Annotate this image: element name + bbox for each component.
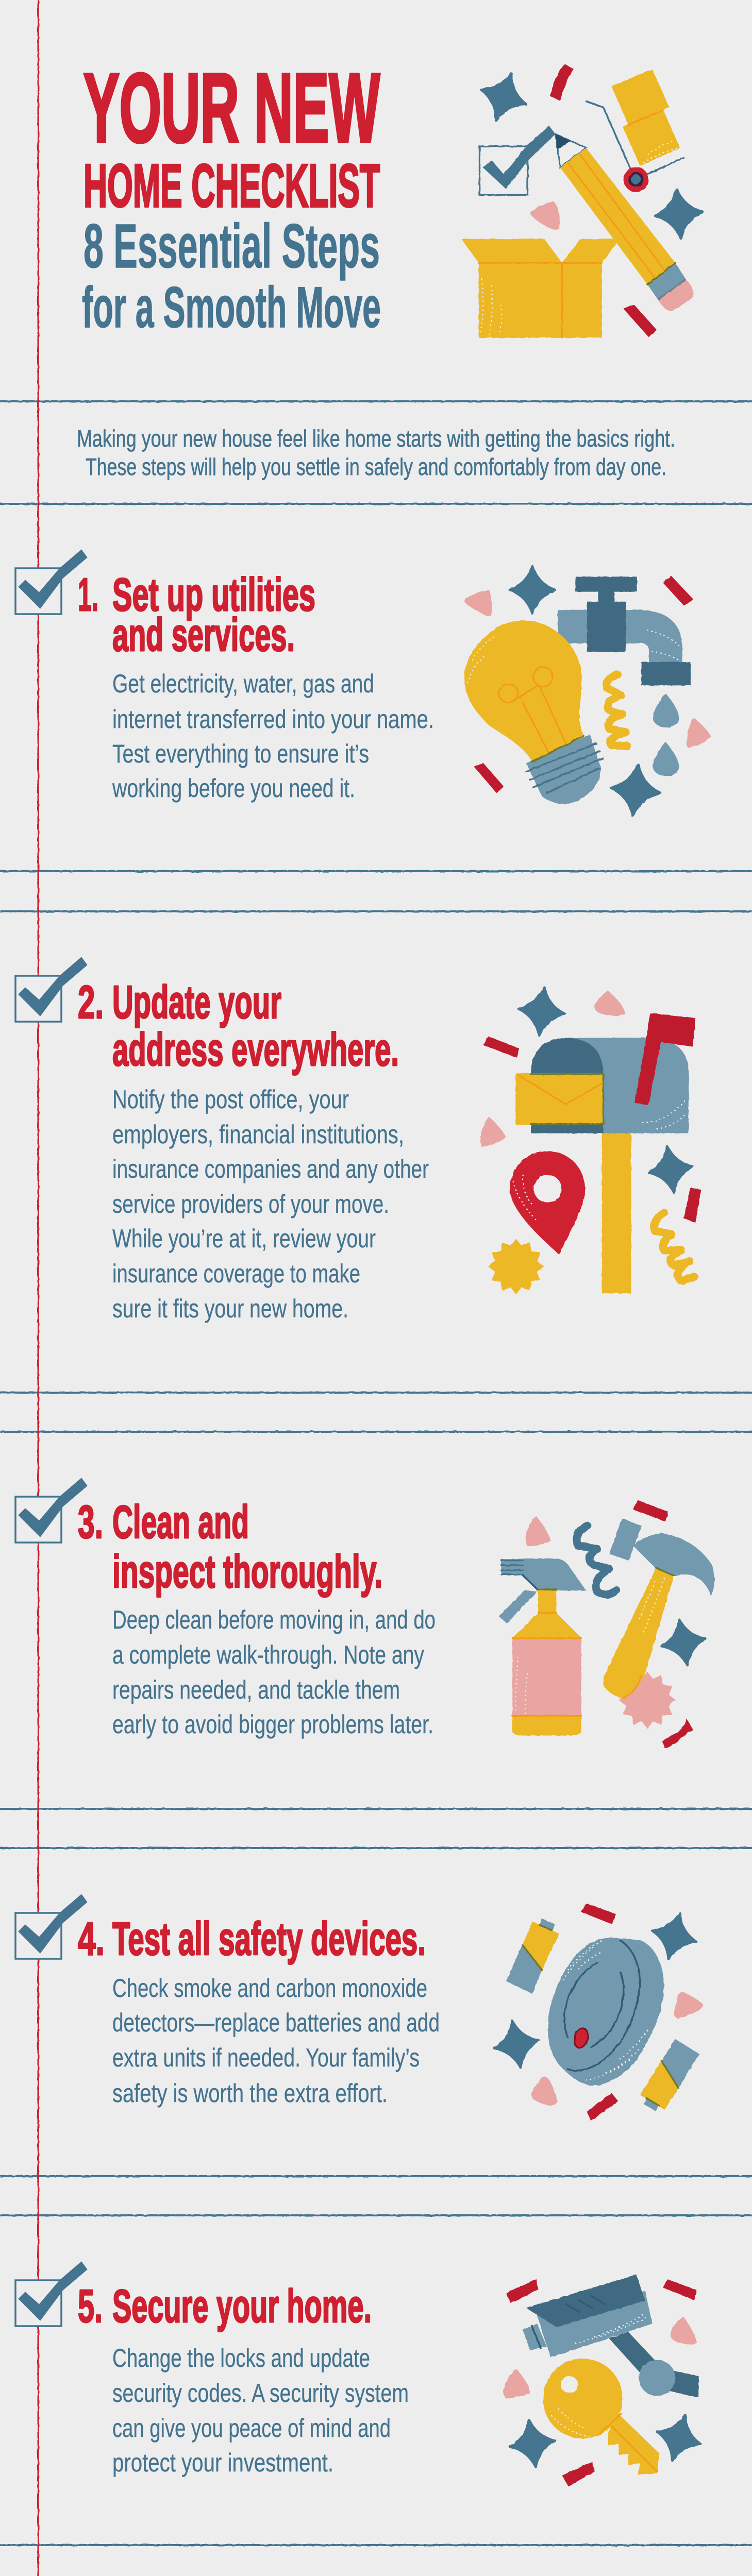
icon: battery top — [506, 1919, 559, 1994]
text: step 5 body — [112, 2344, 409, 2477]
icon: checkbox 1 — [15, 550, 87, 614]
icon: faucet — [558, 577, 691, 685]
panel: step 2 — [15, 957, 701, 1323]
heading: step 1 — [78, 569, 315, 661]
heading: step 3: inspect thoroughly. — [112, 1546, 382, 1598]
icon: key — [543, 2359, 659, 2475]
heading: step 3 — [78, 1497, 382, 1598]
illustration: light bulb and faucet — [464, 566, 711, 819]
panel: step 5 — [15, 2262, 707, 2486]
text: step 3 body: a complete walk-through. Note any — [112, 1640, 424, 1669]
text: step 1 body — [112, 669, 434, 803]
heading: step 4: Test all safety devices. — [112, 1913, 426, 1965]
icon: pencil — [556, 134, 694, 312]
icon: mailbox — [515, 1013, 695, 1293]
illustration: spray bottle and hammer — [499, 1500, 714, 1749]
illustration: smoke detector and batteries — [490, 1903, 703, 2121]
panel: step 4 — [15, 1894, 703, 2121]
text: step 2 body: sure it fits your new home. — [112, 1294, 348, 1323]
text: step 1 body: Get electricity, water, gas and — [112, 669, 374, 698]
icon: security camera — [523, 2275, 699, 2398]
text: step 2 body: service providers of your move. — [112, 1190, 389, 1218]
text: step 3 body: early to avoid bigger problems later. — [112, 1710, 433, 1739]
title: YOUR NEW — [83, 54, 380, 163]
icon: hand truck with boxes — [586, 70, 683, 192]
illustration: box, pencil and checkbox — [461, 64, 705, 338]
illustration: mailbox and location pin — [481, 985, 701, 1294]
text: step 2 body: insurance companies and any other — [112, 1155, 429, 1183]
text: step 4 body: detectors—replace batteries and add — [112, 2008, 440, 2037]
title: for a Smooth Move — [82, 275, 381, 340]
icon: smoke detector — [548, 1938, 664, 2086]
heading: step 2: address everywhere. — [112, 1024, 399, 1076]
icon: checkbox 3 — [15, 1478, 87, 1543]
text: step 2 body — [112, 1085, 429, 1323]
icon: checked box — [480, 126, 556, 195]
heading: step 5: Secure your home. — [112, 2281, 372, 2332]
text: step 2 body: While you’re at it, review your — [112, 1224, 376, 1253]
text: step 4 body: Check smoke and carbon monoxide — [112, 1974, 427, 2003]
text: step 5 body: protect your investment. — [112, 2448, 333, 2477]
text: step 1 body: Test everything to ensure it’s — [112, 739, 369, 768]
icon: hammer — [603, 1518, 714, 1699]
panel: step 1 — [15, 550, 711, 819]
icon: location pin — [510, 1151, 585, 1255]
intro text — [77, 425, 675, 480]
text: step 3 body: repairs needed, and tackle them — [112, 1675, 400, 1704]
text: step 5 body: security codes. A security system — [112, 2379, 409, 2408]
icon: spray bottle — [499, 1559, 586, 1736]
title: HOME CHECKLIST — [83, 152, 380, 220]
text: step 3 body — [112, 1605, 436, 1739]
text: step 2 body: employers, financial institutions, — [112, 1120, 404, 1149]
heading: step 1: and services. — [112, 609, 295, 661]
text: step 4 body: extra units if needed. Your family’s — [112, 2043, 420, 2072]
title: 8 Essential Steps — [83, 211, 380, 281]
heading: step 2: 2. — [78, 977, 104, 1028]
heading: step 5 — [78, 2281, 372, 2332]
icon: checkbox 4 — [15, 1894, 87, 1959]
icon: light bulb — [464, 620, 603, 804]
heading: step 5: 5. — [78, 2281, 103, 2332]
panel: step 3 — [15, 1478, 714, 1749]
text: step 2 body: Notify the post office, your — [112, 1085, 349, 1114]
text: step 5 body: can give you peace of mind and — [112, 2414, 391, 2443]
text: step 5 body: Change the locks and update — [112, 2344, 370, 2372]
illustration: security camera and key — [504, 2275, 707, 2486]
text: step 1 body: working before you need it. — [112, 774, 355, 803]
heading: step 1: Set up utilities — [112, 569, 315, 621]
heading: step 2: Update your — [112, 977, 281, 1028]
icon: battery bottom — [640, 2039, 699, 2111]
text: step 2 body: insurance coverage to make — [112, 1259, 360, 1288]
heading: step 2 — [78, 977, 399, 1076]
text: step 4 body — [112, 1974, 440, 2108]
title — [82, 54, 381, 340]
heading: step 1: 1. — [78, 569, 98, 621]
heading: step 3: Clean and — [112, 1497, 249, 1548]
icon: open box — [461, 239, 620, 338]
heading: step 4 — [78, 1913, 426, 1965]
icon: checkbox 2 — [15, 957, 87, 1022]
heading: step 4: 4. — [78, 1913, 105, 1965]
text: step 4 body: safety is worth the extra effort. — [112, 2079, 388, 2108]
text: step 3 body: Deep clean before moving in, and do — [112, 1605, 436, 1634]
icon: checkbox 5 — [15, 2262, 87, 2326]
text: step 1 body: internet transferred into your name. — [112, 705, 434, 734]
heading: step 3: 3. — [78, 1497, 103, 1548]
